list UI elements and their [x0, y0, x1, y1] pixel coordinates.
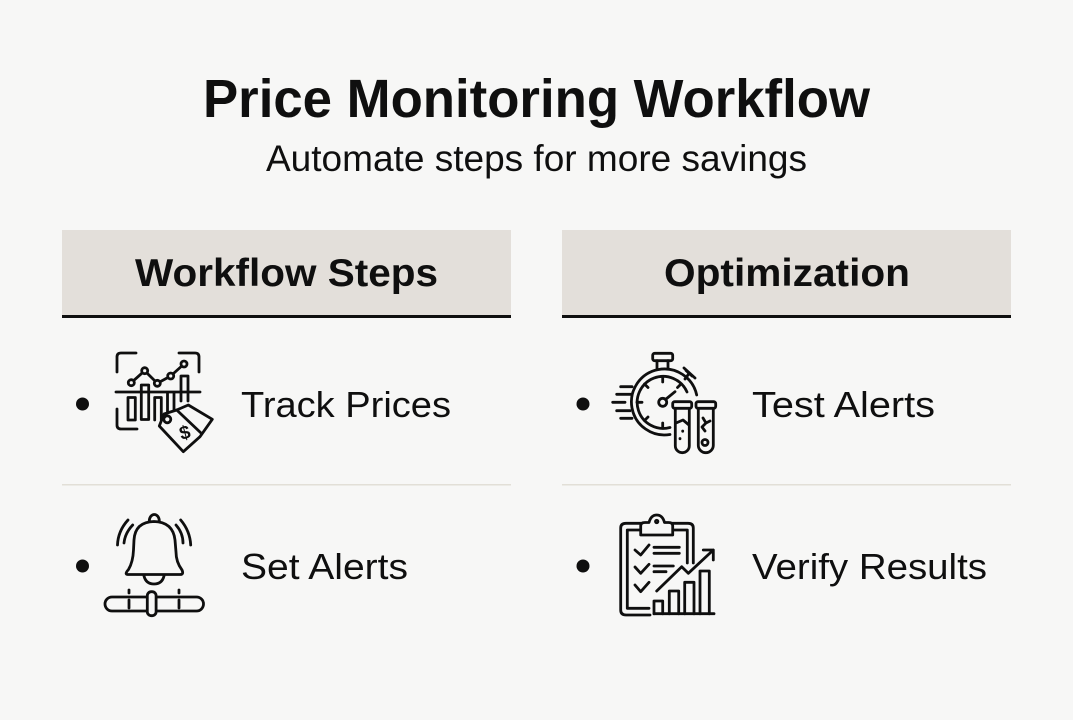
subtitle: Automate steps for more savings — [266, 138, 807, 179]
bullet — [576, 560, 590, 572]
bullet — [576, 398, 590, 410]
label: verify results: Verify Results — [752, 546, 987, 587]
bullet — [76, 398, 89, 410]
panel: workflow steps — [62, 230, 511, 616]
icon: dollar sign: $ — [177, 422, 193, 445]
icon: price chart with tag — [116, 353, 212, 452]
icon: bell with slider — [105, 514, 204, 616]
heading: optimization — [562, 230, 1011, 318]
heading: optimization: Optimization — [664, 252, 910, 295]
heading: workflow steps — [62, 230, 511, 318]
title: Price Monitoring Workflow — [203, 69, 871, 129]
label: test alerts: Test Alerts — [752, 384, 935, 425]
panel: optimization — [562, 230, 1011, 615]
icon: clipboard with growth chart — [621, 515, 714, 615]
heading: workflow steps: Workflow Steps — [135, 252, 438, 295]
label: set alerts: Set Alerts — [241, 546, 408, 587]
label: track prices: Track Prices — [241, 384, 451, 425]
bullet — [76, 560, 89, 572]
icon: stopwatch with test tubes — [613, 353, 716, 453]
